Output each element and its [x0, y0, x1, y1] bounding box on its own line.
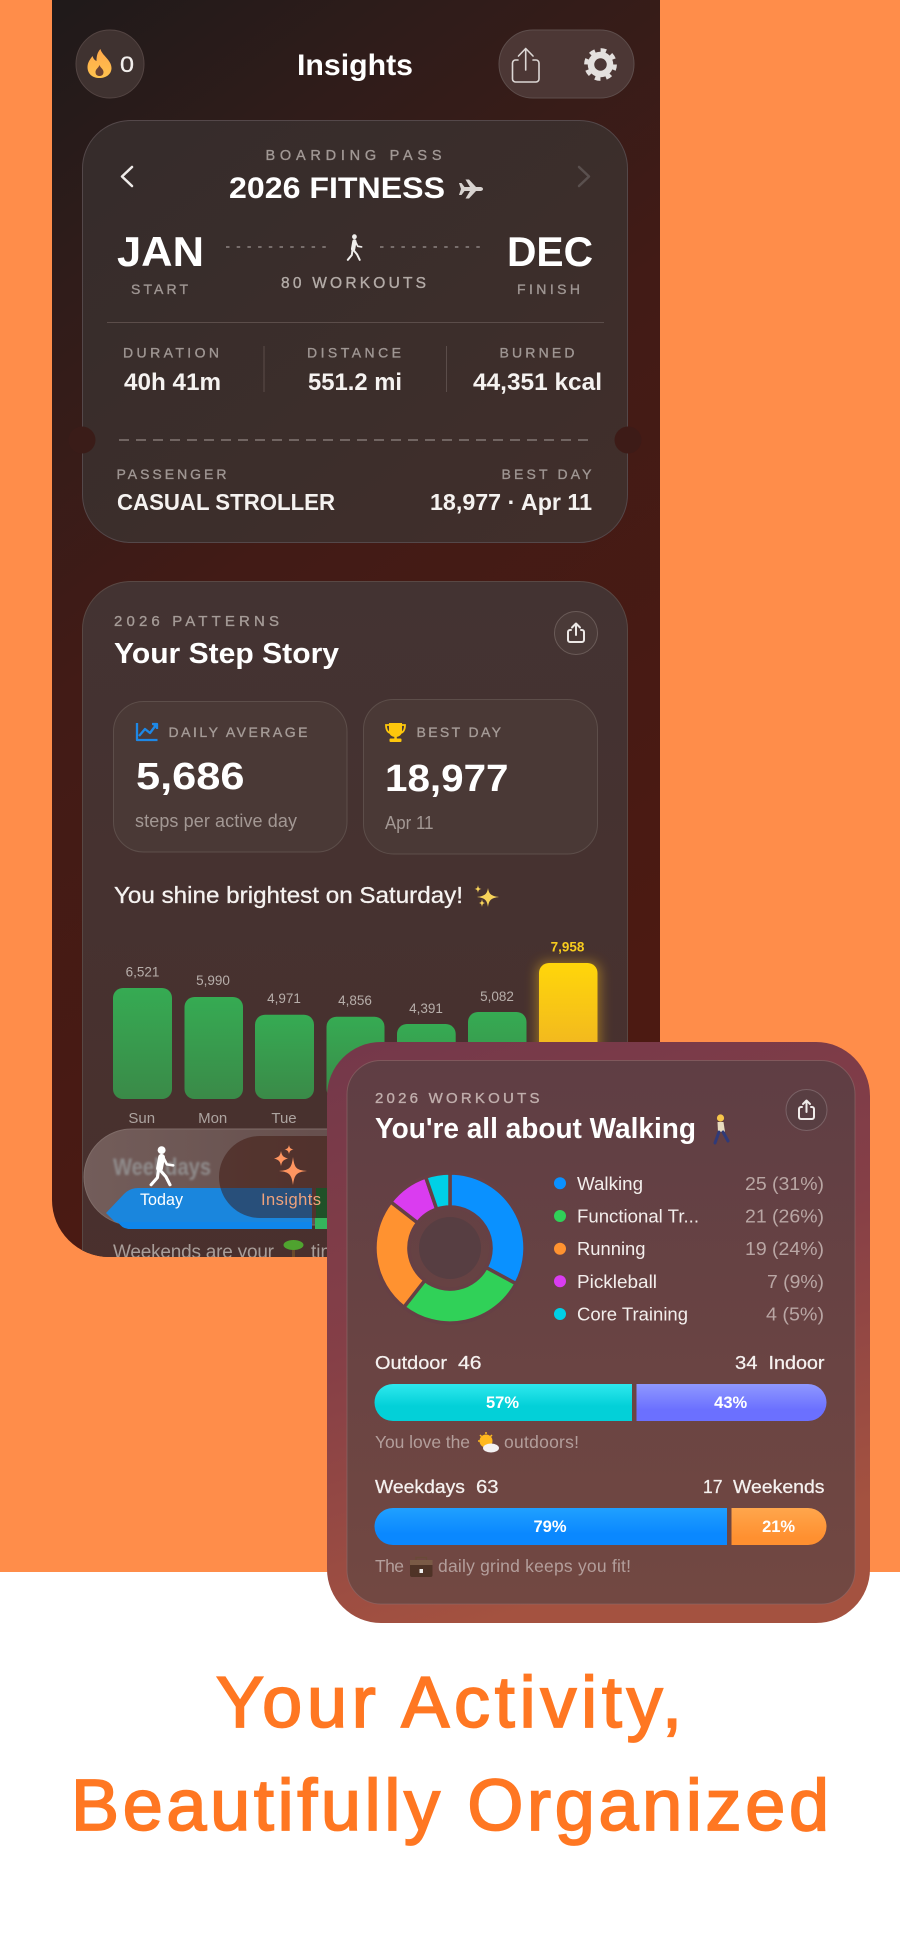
icon: sun and cloud	[478, 1432, 499, 1452]
green bar below glass	[315, 1218, 330, 1229]
icon: walker	[348, 234, 362, 260]
bar: wednesday	[326, 993, 384, 1099]
best day: BEST DAY	[502, 466, 592, 482]
donut centre	[419, 1217, 481, 1279]
icon: share	[512, 48, 539, 82]
split: outdoor vs indoor: 43%	[714, 1394, 748, 1412]
bar: monday	[184, 973, 243, 1127]
phone screenshot	[52, 0, 660, 1302]
headline: Beautifully Organized	[71, 1766, 829, 1846]
icon: chart	[137, 723, 158, 740]
donut chart	[375, 1173, 525, 1323]
stat card: daily average: 5,686	[136, 756, 244, 798]
today tab label: Today	[140, 1191, 184, 1209]
stat: distance: DISTANCE	[307, 344, 401, 360]
legend: pickleball: 7 (9%)	[767, 1272, 824, 1292]
clipped weekend caption	[113, 1240, 347, 1263]
stat card: daily average	[114, 702, 347, 852]
bar: tuesday: Tue	[271, 1110, 297, 1127]
legend	[554, 1174, 824, 1324]
bar: monday: 5,990	[196, 973, 230, 988]
insights tab label: Insights	[261, 1191, 321, 1209]
streak count: 0	[120, 52, 134, 77]
bar segment: weekdays	[375, 1508, 727, 1545]
legend: walking	[554, 1174, 824, 1194]
split: weekdays vs weekends: 17	[703, 1476, 722, 1497]
boarding pass title: 2026 FITNESS	[229, 172, 445, 205]
stat card: best day: BEST DAY	[416, 724, 502, 740]
tab bar	[84, 1129, 449, 1229]
split: outdoor vs indoor: Outdoor	[375, 1352, 447, 1373]
split: weekdays vs weekends: 63	[476, 1476, 498, 1497]
split: weekdays vs weekends: Weekdays	[375, 1476, 465, 1497]
bar: saturday	[539, 940, 598, 1099]
tab bar glass	[84, 1129, 430, 1225]
icon: walking person emoji	[715, 1114, 728, 1143]
segment: running	[375, 1202, 425, 1307]
blurred heading through glass: Weekdays	[113, 1154, 211, 1181]
split: weekdays vs weekends: 21%	[762, 1518, 795, 1536]
bar: thursday: 4,391	[409, 1001, 443, 1016]
clipped weekend caption: time	[311, 1242, 347, 1263]
headline	[71, 1663, 829, 1846]
bar segment: outdoor	[375, 1384, 632, 1421]
stat card: daily average: steps per active day	[135, 811, 297, 831]
blue bar below glass	[118, 1222, 312, 1229]
background bar through glass	[106, 1188, 340, 1225]
legend: walking: Walking	[577, 1174, 643, 1194]
streak badge	[76, 30, 144, 98]
icon: flame	[88, 49, 112, 78]
legend: pickleball	[554, 1272, 824, 1292]
stat: burned: 44,351 kcal	[473, 369, 602, 396]
panel: step story	[82, 582, 628, 1302]
icon: chevron left	[122, 167, 132, 186]
screen title: Insights	[297, 49, 413, 82]
ticket notch right	[614, 426, 642, 454]
share button	[786, 1090, 827, 1130]
route start: START	[131, 281, 188, 297]
stat card: best day	[364, 700, 598, 854]
icon: gear	[586, 50, 615, 79]
legend: running: 19 (24%)	[745, 1239, 824, 1259]
bar: tuesday: 4,971	[267, 991, 301, 1006]
icon: sparkles	[474, 885, 499, 907]
panel: boarding pass	[68, 120, 642, 542]
icon: walker	[151, 1146, 173, 1185]
headline: Your Activity,	[216, 1663, 682, 1743]
split: weekdays vs weekends: Weekends	[733, 1476, 824, 1497]
stat: duration: DURATION	[123, 344, 219, 360]
legend: functional training	[554, 1206, 824, 1226]
ticket notch left	[82, 426, 96, 454]
overlay card: workouts	[327, 1042, 870, 1623]
route start: JAN	[117, 228, 204, 275]
weekdays caption: The	[375, 1556, 404, 1576]
toolbar pill	[499, 30, 634, 98]
legend: walking: 25 (31%)	[745, 1174, 824, 1194]
segment: pickleball	[391, 1177, 437, 1223]
split: weekdays vs weekends	[375, 1476, 827, 1577]
bar: thursday	[397, 1001, 456, 1099]
card label: 2026 WORKOUTS	[375, 1090, 540, 1107]
icon: chevron right	[579, 167, 589, 186]
legend: running: Running	[577, 1239, 646, 1259]
bar: wednesday: 4,856	[338, 993, 372, 1008]
legend: core training	[554, 1304, 824, 1324]
outdoor caption: outdoors!	[504, 1432, 579, 1452]
insight sentence: You shine brightest on Saturday!	[114, 882, 463, 908]
split: outdoor vs indoor	[375, 1352, 827, 1452]
bar segment: weekends	[732, 1508, 827, 1545]
legend: running	[554, 1239, 824, 1259]
bar: sunday	[113, 964, 172, 1127]
stat card: best day: 18,977	[385, 758, 508, 800]
stat card: best day: Apr 11	[385, 813, 434, 833]
bar: monday: Mon	[198, 1110, 227, 1127]
icon: briefcase	[410, 1558, 432, 1577]
legend: functional training: 21 (26%)	[745, 1206, 824, 1226]
share button	[554, 612, 598, 654]
glow: saturday	[530, 955, 607, 1042]
segment: functional training	[404, 1268, 516, 1323]
passenger	[118, 469, 334, 510]
best day: 18,977 · Apr 11	[430, 489, 592, 515]
legend: core training: Core Training	[577, 1304, 688, 1324]
legend: functional training: Functional Tr...	[577, 1206, 699, 1226]
stat: distance	[308, 348, 400, 390]
stat card: daily average: DAILY AVERAGE	[168, 724, 308, 740]
bar: friday	[468, 989, 526, 1099]
outdoor caption: You love the	[375, 1432, 470, 1452]
legend: core training: 4 (5%)	[766, 1304, 824, 1324]
boarding pass label: BOARDING PASS	[266, 148, 442, 164]
bar segment: indoor	[636, 1384, 827, 1421]
icon: sparkle	[274, 1145, 307, 1185]
split: outdoor vs indoor: Indoor	[768, 1352, 824, 1373]
stat: duration	[124, 348, 220, 390]
icon: plane	[459, 180, 483, 198]
workouts count: 80 WORKOUTS	[281, 275, 426, 292]
bar: tuesday	[255, 991, 314, 1127]
route end	[510, 237, 592, 294]
route start	[118, 237, 202, 294]
panel heading: Your Step Story	[114, 638, 339, 670]
icon: palm	[284, 1240, 304, 1259]
outdoor caption	[375, 1432, 579, 1452]
split: outdoor vs indoor: 46	[458, 1352, 482, 1373]
passenger: CASUAL STROLLER	[117, 489, 335, 515]
split: weekdays vs weekends: 79%	[533, 1518, 567, 1536]
bar: sunday: 6,521	[126, 964, 159, 980]
route end: FINISH	[517, 281, 580, 297]
clipped weekend caption: Weekends are your	[113, 1242, 275, 1263]
route line	[226, 234, 483, 292]
segment: core training	[426, 1173, 450, 1209]
weekdays caption: daily grind keeps you fit!	[438, 1556, 631, 1576]
legend: pickleball: Pickleball	[577, 1272, 657, 1292]
stat: duration: 40h 41m	[124, 369, 221, 396]
panel label: 2026 PATTERNS	[114, 613, 279, 630]
route end: DEC	[507, 228, 593, 275]
icon: trophy	[386, 723, 405, 742]
segment: walking	[450, 1173, 525, 1284]
passenger: PASSENGER	[116, 466, 226, 482]
stat: distance: 551.2 mi	[308, 369, 402, 396]
stat: burned: BURNED	[500, 344, 574, 360]
split: outdoor vs indoor: 34	[735, 1352, 758, 1373]
split: outdoor vs indoor: 57%	[486, 1394, 519, 1412]
card heading: You're all about Walking	[375, 1113, 696, 1145]
bar: saturday: 7,958	[551, 940, 585, 954]
bar: friday: 5,082	[480, 989, 514, 1004]
selected tab	[219, 1136, 449, 1218]
bar chart: steps by weekday	[113, 940, 600, 1127]
bar: sunday: Sun	[128, 1110, 155, 1127]
best day	[430, 466, 592, 515]
stat: burned	[473, 348, 600, 394]
